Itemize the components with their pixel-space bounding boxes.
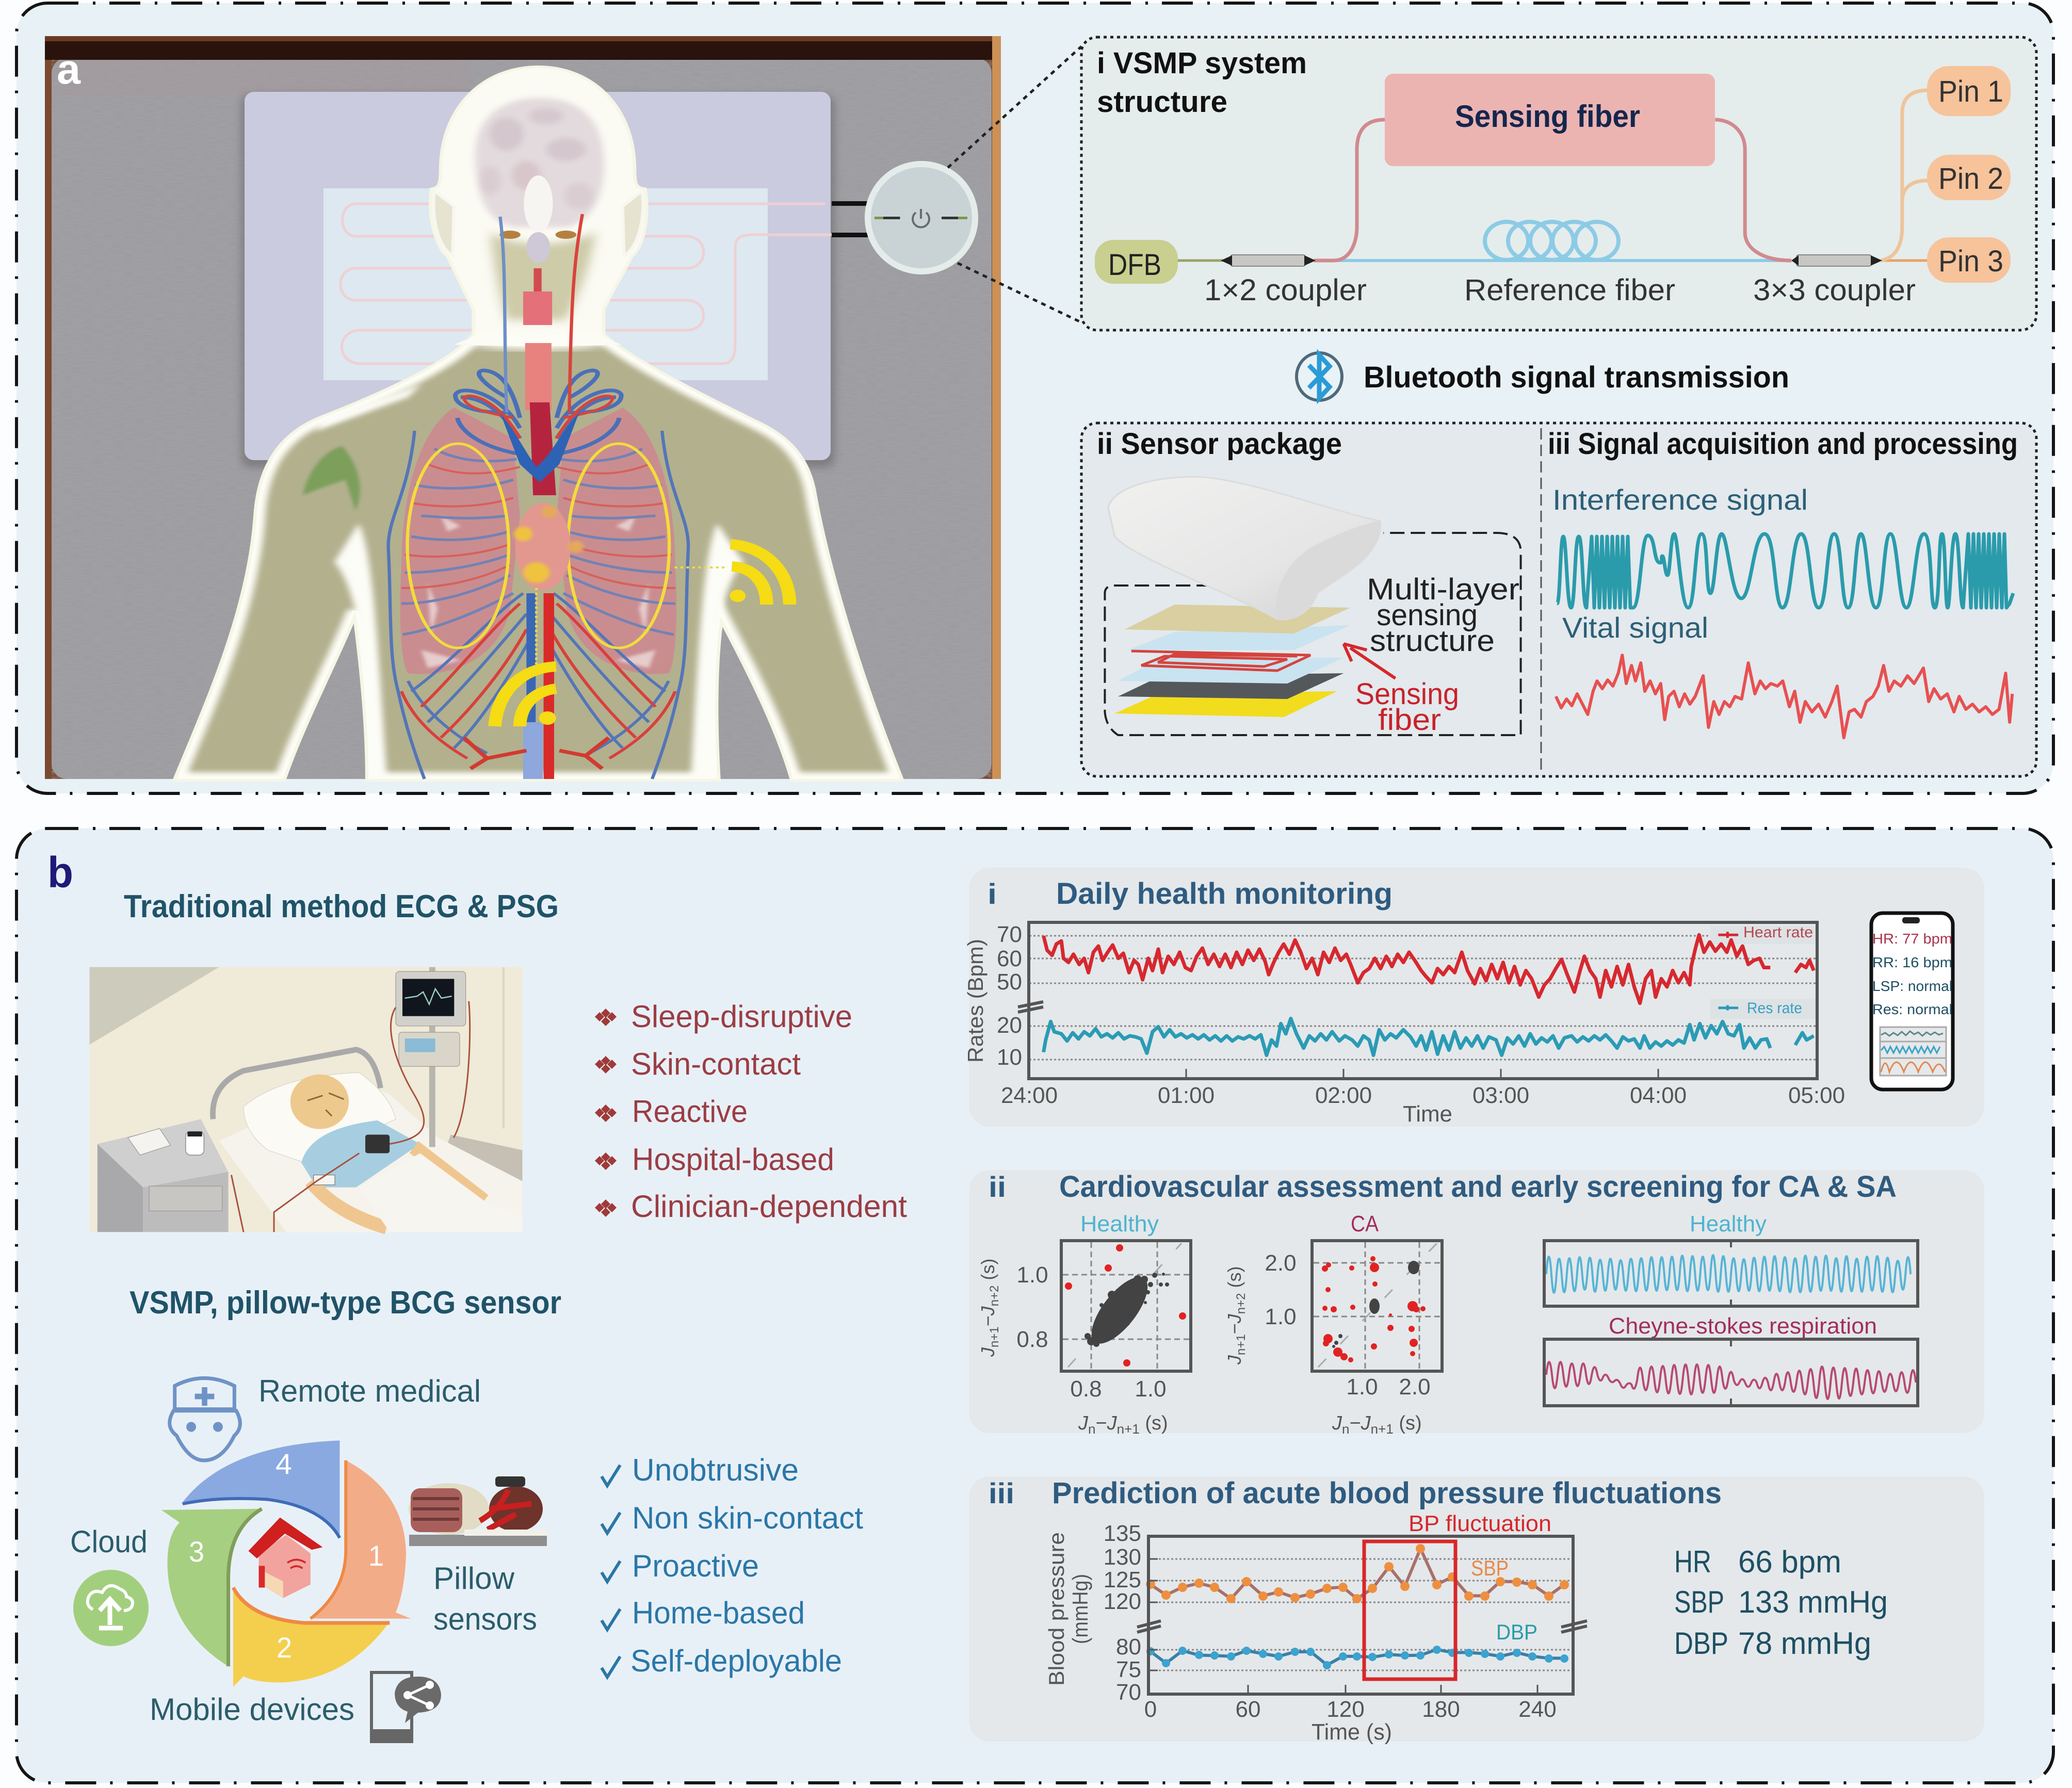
face and throat (490, 175, 595, 320)
axis frame box (1029, 922, 1817, 1079)
y tick labels: 130 (1104, 1545, 1141, 1570)
sensor module (832, 164, 975, 271)
heading: signal acquisition: iii Signal acquisition and processing (1548, 427, 2018, 461)
1x2 coupler (1221, 255, 1316, 266)
phone readout (1871, 913, 1953, 1090)
illustration: pillow sensors photo (409, 1476, 547, 1546)
label: 1x2 coupler: 1×2 coupler (1204, 273, 1367, 307)
label: healthy scatter: Healthy (1080, 1211, 1159, 1237)
item 1: Unobtrusive (632, 1453, 799, 1487)
label: SBP: SBP (1471, 1556, 1509, 1580)
y axis title line 2: (mmHg) (1068, 1574, 1092, 1644)
heading line 2: structure (1097, 85, 1227, 119)
label: BP fluctuation: BP fluctuation (1409, 1511, 1551, 1536)
panel i: VSMP system structure (1081, 37, 2036, 330)
readout: HR (1674, 1545, 1841, 1579)
y axis title: J (977, 1306, 998, 1316)
readout: DBP: 78 mmHg (1738, 1626, 1871, 1661)
label: multi-layer: Multi-layer (1367, 573, 1519, 606)
readout: HR: HR (1674, 1545, 1711, 1579)
section ii: cardiovascular assessment (969, 1170, 1984, 1437)
y tick labels: 70 (997, 922, 1022, 947)
y axis title: Rates (Bpm) (963, 939, 988, 1063)
x axis title: n+1 (1371, 1421, 1394, 1437)
item 2: Non skin-contact (632, 1501, 863, 1535)
x axis title: − (1349, 1412, 1361, 1434)
y axis title: n+2 (1234, 1293, 1248, 1314)
axis frame (1186, 1069, 1658, 1079)
section i: daily health monitoring (963, 868, 1984, 1127)
section background (969, 1476, 1984, 1742)
arrow 3 (161, 1509, 262, 1666)
label: interference signal: Interference signal (1552, 483, 1808, 516)
label: 3x3 coupler: 3×3 coupler (1753, 273, 1916, 307)
lungs, ribs and vessels (388, 214, 688, 779)
y tick labels: 125 (1104, 1567, 1141, 1592)
illustration: patient in hospital bed (89, 967, 522, 1232)
system panel frame (1081, 37, 2036, 330)
x tick 2.0: 2.0 (1399, 1374, 1431, 1400)
heading: Cardiovascular assessment and early screening for CA & SA (1059, 1170, 1897, 1204)
legend backgrounds (1710, 926, 1816, 1019)
pin 3: Pin 3 (1938, 245, 2003, 278)
chart: CA poincare plot (1312, 1241, 1442, 1371)
SBP markers (1146, 1544, 1569, 1603)
list: drawbacks (595, 999, 907, 1224)
y axis title: n+2 (988, 1286, 1001, 1306)
phone body (1871, 913, 1953, 1090)
heading: sensor package: ii Sensor package (1097, 427, 1342, 461)
y axis title: (s) (977, 1259, 998, 1286)
y tick labels: 75 (1116, 1657, 1141, 1682)
panel b background (17, 828, 2053, 1783)
x axis title: J (1107, 1412, 1118, 1434)
x tick labels: 01:00 (1158, 1083, 1215, 1108)
y tick labels: 80 (1116, 1634, 1141, 1660)
green shoulder mark (303, 446, 360, 511)
panel b (17, 828, 2053, 1783)
label b: b (47, 848, 73, 897)
arrow 2 (233, 1587, 390, 1687)
readout: DBP: DBP (1674, 1626, 1728, 1661)
dashed outline (1105, 533, 1521, 735)
x tick labels: 0 (1144, 1697, 1157, 1722)
legend: heart rate: Heart rate (1743, 924, 1813, 941)
x tick labels: 120 (1326, 1697, 1365, 1722)
chart: vital signal (1556, 655, 2012, 738)
x axis title: − (1095, 1412, 1107, 1434)
chart: healthy respiration (1544, 1241, 1918, 1306)
y tick labels (997, 922, 1022, 1070)
wireless signal: abdomen (495, 667, 556, 726)
ears (433, 191, 643, 255)
y axis title: − (977, 1315, 998, 1326)
arrow 4 (182, 1440, 339, 1538)
panel a background (17, 3, 2053, 793)
y tick labels: 60 (997, 946, 1022, 971)
x tick labels: 60 (1236, 1697, 1260, 1722)
axis frame (1148, 1536, 1573, 1694)
trace: heart rate (1044, 932, 1814, 1003)
y tick 2.0: 2.0 (1265, 1250, 1297, 1276)
x axis title: n (1088, 1421, 1095, 1437)
Res readout: Res: normal (1872, 1001, 1952, 1017)
sensing fibre sheet (323, 188, 836, 380)
chart: healthy poincare plot (1061, 1241, 1191, 1371)
step 2: 2 (277, 1631, 292, 1664)
heading: bluetooth: Bluetooth signal transmission (1364, 361, 1789, 394)
x tick labels: 02:00 (1315, 1083, 1372, 1108)
sensing fiber box: Sensing fiber (1455, 99, 1640, 134)
highlight box (1364, 1541, 1455, 1679)
panel a (17, 3, 2053, 793)
sensing fiber box (1385, 74, 1715, 166)
panels ii and iii (1081, 423, 2036, 776)
icon: doctor (170, 1378, 240, 1460)
x axis title: Time (s) (1312, 1719, 1392, 1745)
x axis title: J (1078, 1412, 1089, 1434)
heading: Prediction of acute blood pressure fluctuations (1052, 1476, 1722, 1510)
y tick labels: 135 (1104, 1521, 1141, 1546)
label a: a (57, 46, 81, 93)
illustration: person on pillow (45, 36, 1001, 779)
icon: cloud upload (73, 1570, 149, 1646)
x tick labels: 180 (1422, 1697, 1460, 1722)
label: pillow: Pillow (433, 1561, 515, 1596)
item 3: Proactive (632, 1549, 759, 1583)
head and neck (432, 68, 645, 346)
section background (969, 868, 1984, 1127)
icon: phone share (371, 1672, 441, 1743)
y tick labels (1104, 1521, 1141, 1705)
x axis title: (s) (1394, 1412, 1422, 1434)
x tick 0.8: 0.8 (1070, 1376, 1102, 1402)
wireless signal: chest (730, 544, 790, 605)
heading: VSMP pillow: VSMP, pillow-type BCG sensor (130, 1285, 561, 1321)
label: fiber (red): fiber (1378, 703, 1441, 737)
x axis title: J (1361, 1412, 1371, 1434)
label: sensing: sensing (1377, 598, 1478, 632)
heading: traditional method: Traditional method ECG & PSG (124, 889, 559, 924)
label: CA: CA (1351, 1211, 1379, 1237)
label: vital signal: Vital signal (1562, 611, 1708, 644)
pin 2: Pin 2 (1938, 162, 2003, 196)
readout: DBP (1674, 1626, 1871, 1661)
LSP readout: LSP: normal (1872, 978, 1952, 994)
step 4: 4 (276, 1448, 292, 1480)
legend: res rate: Res rate (1747, 1000, 1802, 1017)
3x3 coupler (1791, 255, 1882, 266)
label: sensors: sensors (433, 1602, 537, 1636)
x tick 1.0: 1.0 (1135, 1376, 1167, 1402)
y tick labels: 120 (1104, 1589, 1141, 1614)
trace: respiratory rate (1044, 1005, 1814, 1055)
gridlines (1151, 1559, 1572, 1670)
x axis title: Time (1403, 1101, 1452, 1127)
y axis title: (s) (1224, 1266, 1245, 1293)
x tick labels (1001, 1083, 1845, 1108)
collar highlight (469, 331, 607, 350)
y tick labels: 10 (997, 1045, 1022, 1070)
item 3: Reactive (632, 1094, 748, 1129)
grid lines (1029, 936, 1816, 1060)
y axis title: − (1224, 1323, 1245, 1334)
chart: blood pressure (1137, 1536, 1587, 1694)
x tick labels: 24:00 (1001, 1083, 1058, 1108)
chart: cheyne-stokes respiration (1544, 1339, 1918, 1406)
label: DBP: DBP (1496, 1620, 1537, 1644)
package frame (1081, 423, 2036, 776)
y axis title: n+1 (1234, 1334, 1248, 1355)
section iii: blood pressure prediction (969, 1476, 1984, 1745)
pin 3 (1927, 237, 2011, 283)
y tick 1.0: 1.0 (1265, 1304, 1297, 1329)
DFB laser (1095, 240, 1178, 284)
numeral iii: iii (989, 1477, 1014, 1509)
label: healthy respiration: Healthy (1690, 1211, 1767, 1237)
SBP trace (1151, 1549, 1564, 1599)
chart: interference signal (1557, 534, 2013, 608)
pin 2 (1927, 155, 2011, 200)
dotted signal paths (537, 567, 727, 671)
axis breaks (1137, 1621, 1587, 1632)
readout: SBP: SBP (1674, 1585, 1724, 1619)
y axis title: n+1 (988, 1326, 1001, 1347)
bluetooth row (1297, 353, 1789, 400)
y tick 1.0: 1.0 (1016, 1262, 1048, 1288)
y tick 0.8: 0.8 (1016, 1327, 1048, 1352)
human body (176, 68, 900, 779)
brain (475, 98, 604, 227)
icon: bluetooth (1297, 353, 1342, 400)
x tick labels (1144, 1697, 1557, 1722)
readout: SBP: 133 mmHg (1738, 1585, 1888, 1619)
y tick labels: 50 (997, 969, 1022, 995)
item 5: Self-deployable (630, 1644, 842, 1678)
reference fiber coil (1485, 222, 1618, 260)
fabric pillow surface (45, 36, 1001, 779)
readout: HR: 66 bpm (1738, 1545, 1841, 1579)
y tick labels: 20 (997, 1013, 1022, 1038)
y tick labels: 70 (1116, 1680, 1141, 1705)
x tick labels: 240 (1518, 1697, 1557, 1722)
heading: i VSMP system (1097, 46, 1307, 80)
y axis title line 1: Blood pressure (1044, 1532, 1069, 1686)
label: reference fiber: Reference fiber (1464, 273, 1675, 307)
arrow 1 (311, 1460, 411, 1619)
item 4: Home-based (632, 1596, 805, 1630)
body silhouette (176, 68, 900, 779)
item 5: Clinician-dependent (631, 1189, 907, 1224)
x tick labels: 04:00 (1630, 1083, 1687, 1108)
HR readout: HR: 77 bpm (1872, 931, 1952, 947)
label: structure: structure (1370, 624, 1495, 658)
readout: SBP (1674, 1585, 1888, 1619)
layers (1115, 605, 1350, 717)
numeral i: i (988, 877, 997, 910)
pillow (1108, 477, 1380, 620)
label: mobile devices: Mobile devices (150, 1692, 354, 1727)
RR readout: RR: 16 bpm (1872, 954, 1952, 970)
x tick labels: 05:00 (1788, 1083, 1845, 1108)
inner white glow (176, 345, 900, 779)
label: remote medical: Remote medical (258, 1374, 481, 1408)
axis break (1018, 1002, 1043, 1012)
multilayer sensor illustration (1105, 477, 1521, 735)
label: cloud: Cloud (70, 1524, 148, 1559)
x axis title: J (1332, 1412, 1342, 1434)
item 4: Hospital-based (632, 1142, 834, 1177)
red arrow (1343, 644, 1396, 678)
chart: rates (963, 922, 1845, 1127)
x axis title: n (1342, 1421, 1349, 1437)
DBP trace (1151, 1650, 1564, 1665)
y axis title: J (1224, 1313, 1245, 1324)
label: sensing (red): Sensing (1355, 677, 1459, 711)
x tick 1.0: 1.0 (1346, 1374, 1378, 1400)
x axis title: n+1 (1117, 1421, 1140, 1437)
icon: home (248, 1518, 322, 1598)
x axis title: (s) (1140, 1412, 1168, 1434)
DBP markers (1146, 1646, 1568, 1669)
label: cheyne-stokes: Cheyne-stokes respiration (1609, 1313, 1877, 1339)
callout lines from module to system (948, 46, 1081, 322)
numeral ii: ii (989, 1171, 1006, 1203)
sensor base pad (241, 92, 835, 467)
list: advantages (602, 1453, 863, 1678)
pin 1 (1927, 66, 2011, 116)
step 3: 3 (189, 1535, 204, 1568)
item 2: Skin-contact (631, 1047, 801, 1081)
pin 1: Pin 1 (1938, 75, 2003, 108)
diagram: four step cycle (161, 1440, 411, 1687)
y axis title: J (1224, 1355, 1245, 1365)
item 1: Sleep-disruptive (631, 999, 852, 1034)
x tick labels: 03:00 (1472, 1083, 1529, 1108)
section background (969, 1170, 1984, 1433)
step 1: 1 (368, 1539, 384, 1572)
heading: Daily health monitoring (1056, 877, 1393, 911)
DFB laser: DFB (1108, 248, 1161, 282)
mini charts (1880, 1027, 1946, 1076)
fibre paths (1178, 90, 1928, 261)
y axis title: J (977, 1347, 998, 1357)
